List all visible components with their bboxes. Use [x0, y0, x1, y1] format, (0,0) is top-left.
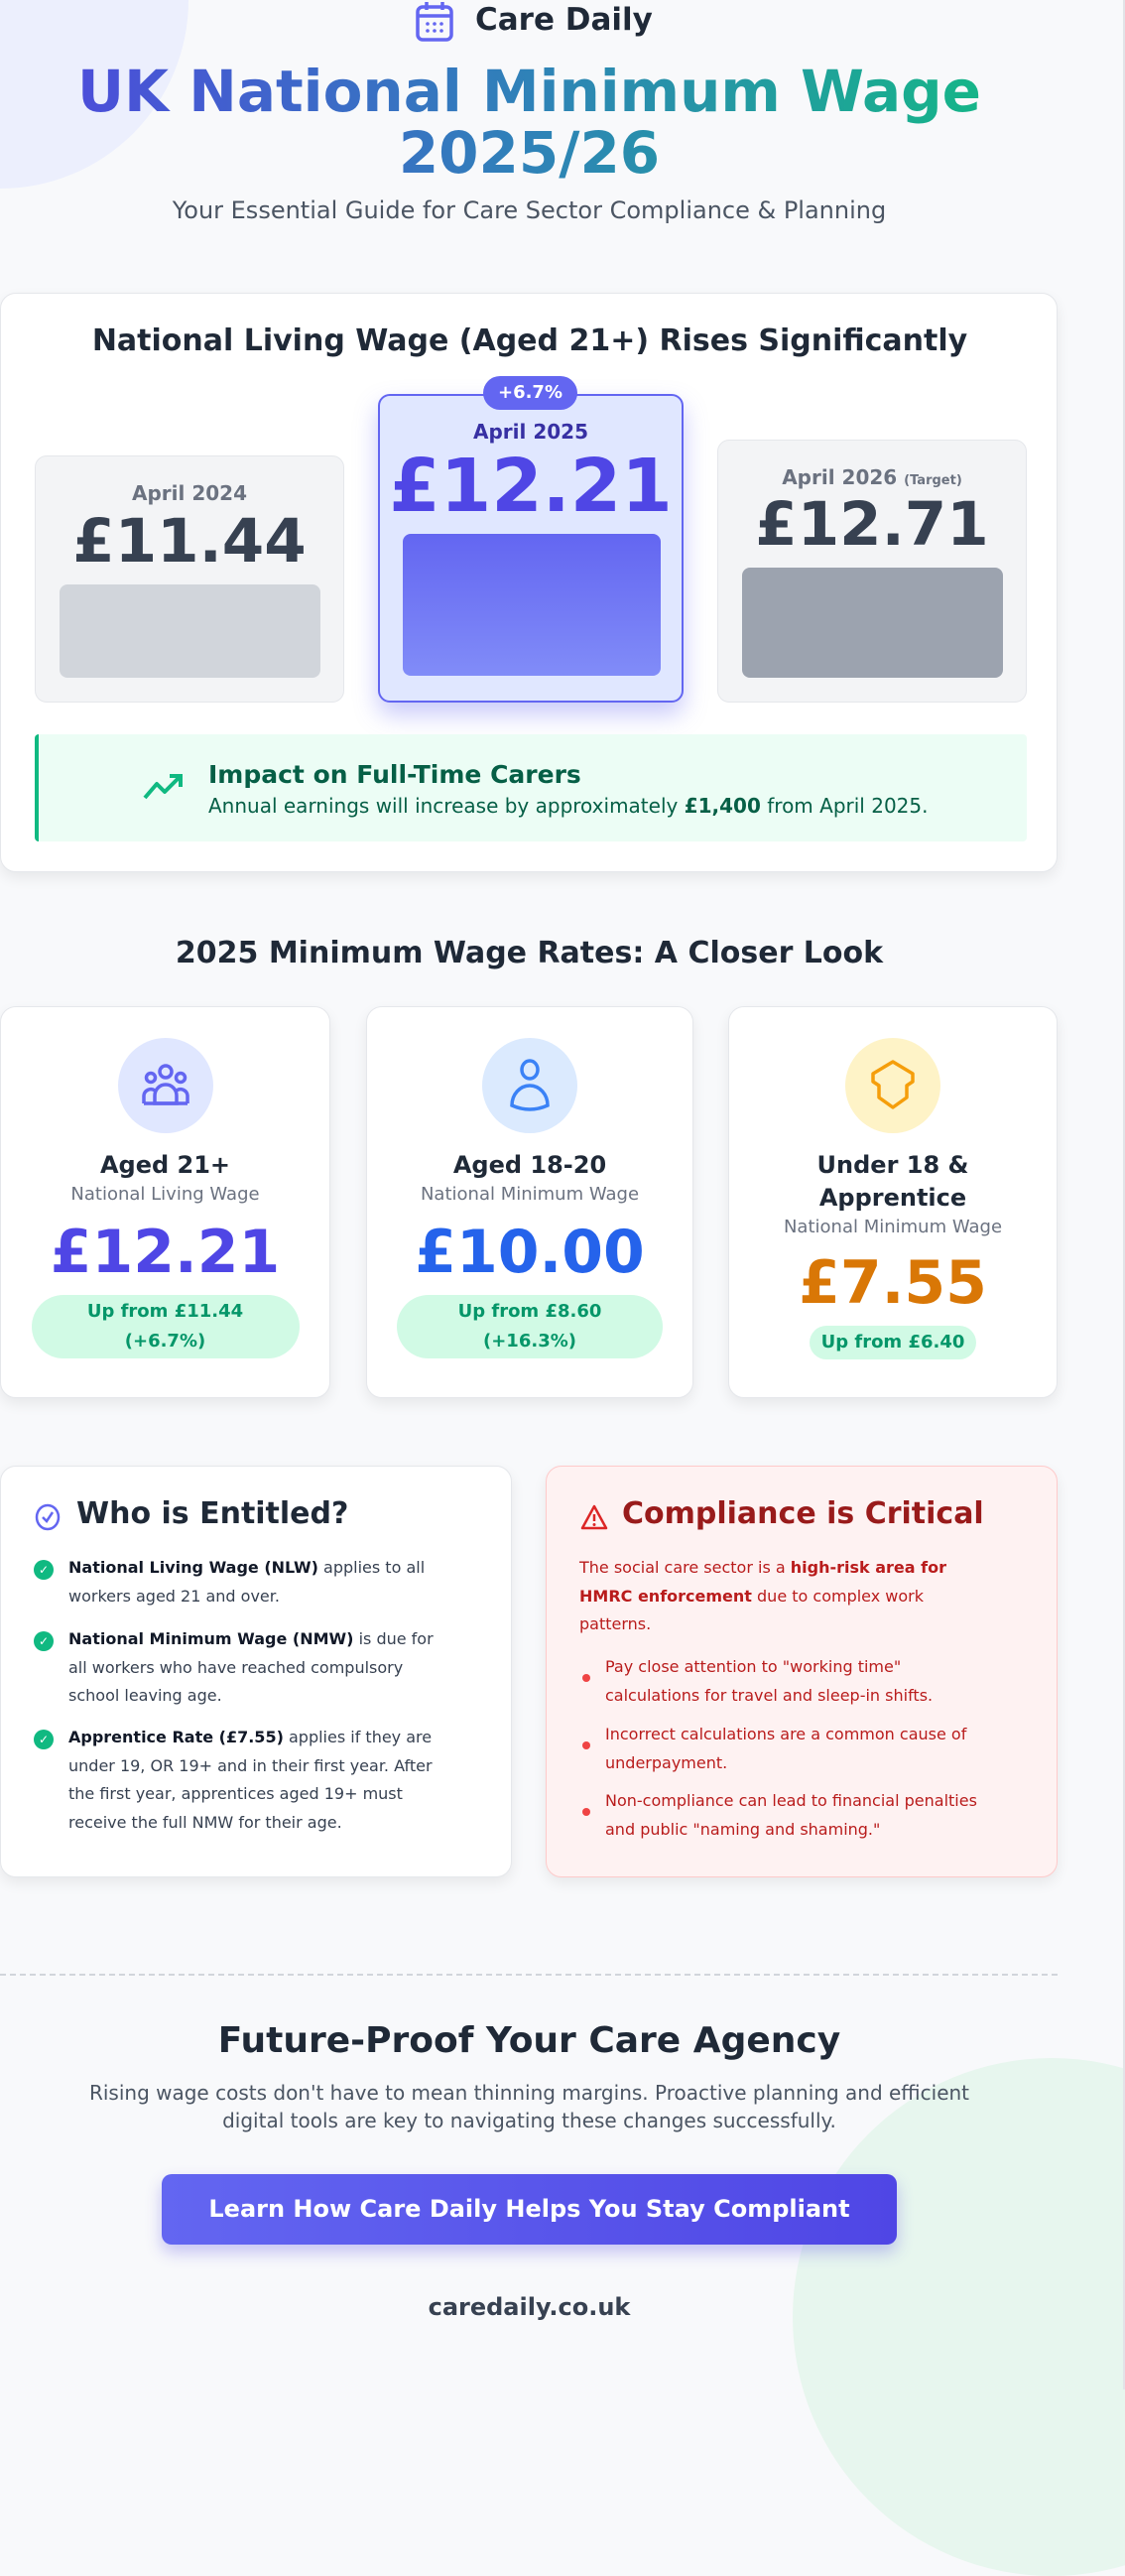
- pill: (+16.3%): [483, 1331, 576, 1352]
- rate card: aged 18-20: Aged 18-20: [453, 1151, 606, 1179]
- badge: +6.7%: +6.7%: [498, 382, 562, 403]
- card: April 2024: £11.44: [72, 506, 307, 577]
- bullet 2: underpayment.: [605, 1752, 727, 1772]
- icon: calendar: [416, 2, 453, 42]
- card: April 2025: April 2025: [473, 420, 588, 444]
- card: April 2026: [717, 440, 1027, 703]
- panel: compliance: Compliance is Critical: [622, 1496, 984, 1531]
- title: 2025/26: [399, 119, 660, 187]
- pill: Up from £11.44: [87, 1301, 243, 1322]
- list item: apprentice: the first year, apprentices aged 19+ must: [68, 1784, 403, 1803]
- rate card: aged 21+: [0, 1006, 330, 1398]
- footer url: caredaily.co.uk: [429, 2293, 630, 2321]
- button: [162, 2174, 897, 2245]
- card: April 2025: [378, 394, 684, 703]
- pill: Up from £8.60: [458, 1301, 601, 1322]
- list item: apprentice: receive the full NMW for their age.: [68, 1812, 342, 1832]
- rate card: under 18 & apprentice: National Minimum Wage: [784, 1217, 1002, 1237]
- panel: who is entitled: [0, 1466, 512, 1877]
- list item: NLW: National Living Wage (NLW) applies to all: [68, 1558, 425, 1577]
- card: April 2025: £12.21: [389, 444, 673, 529]
- rate card: aged 18-20: [366, 1006, 693, 1398]
- pill: Up from £6.40: [821, 1332, 964, 1352]
- callout: impact: [35, 734, 1027, 841]
- panel heading: National Living Wage (Aged 21+) Rises Significantly: [92, 323, 967, 358]
- icon: person: [482, 1038, 577, 1133]
- card: April 2024: [35, 455, 344, 703]
- card: April 2026: £12.71: [755, 489, 989, 560]
- panel: who is entitled: Who is Entitled?: [76, 1496, 348, 1531]
- rate card: under 18 & apprentice: [728, 1006, 1058, 1398]
- icon: group: [117, 1038, 212, 1133]
- title: [0, 61, 1059, 184]
- heading: [36, 1496, 348, 1531]
- list item: NMW: National Minimum Wage (NMW) is due for: [68, 1629, 434, 1648]
- rate card: under 18 & apprentice: Under 18 &: [817, 1151, 968, 1179]
- pill: (+6.7%): [125, 1331, 205, 1352]
- rate card: aged 21+: National Living Wage: [70, 1184, 260, 1205]
- list item: NMW: [34, 1629, 434, 1705]
- rate card: aged 21+: £12.21: [51, 1218, 280, 1287]
- bullet 2: Incorrect calculations are a common cause of: [605, 1725, 966, 1743]
- rate card: aged 18-20: £10.00: [415, 1218, 645, 1287]
- card: April 2024: April 2024: [132, 481, 247, 505]
- panel: national living wage rise: [0, 293, 1058, 872]
- decorative circle top-left: [0, 0, 188, 189]
- pill: [810, 1326, 976, 1359]
- section heading: 2025 Minimum Wage Rates: A Closer Look: [176, 936, 883, 970]
- bullet 3: and public "naming and shaming.": [605, 1820, 880, 1838]
- bullet 3: [582, 1791, 977, 1838]
- heading: [581, 1496, 984, 1531]
- right edge line: [1123, 0, 1125, 2389]
- text: ✓: [39, 1563, 49, 1577]
- list item: NMW: all workers who have reached compulsory: [68, 1657, 403, 1677]
- list item: apprentice: [34, 1728, 433, 1832]
- pill: [32, 1295, 300, 1358]
- badge: +6.7%: [483, 376, 577, 410]
- list item: NLW: [34, 1558, 425, 1606]
- rate card: under 18 & apprentice: Apprentice: [819, 1184, 966, 1212]
- callout: impact: Annual earnings will increase by approximately £1,400 from April 2025.: [208, 794, 928, 818]
- rate card: aged 21+: Aged 21+: [100, 1151, 230, 1179]
- logo: [416, 2, 653, 42]
- compliance intro: patterns.: [579, 1614, 651, 1633]
- rate card: under 18 & apprentice: £7.55: [799, 1248, 987, 1318]
- pill: [397, 1295, 663, 1358]
- callout: impact: Impact on Full-Time Carers: [208, 760, 581, 789]
- bullet 2: [582, 1725, 967, 1772]
- list item: NLW: workers aged 21 and over.: [68, 1586, 280, 1606]
- footer text: Rising wage costs don't have to mean thinning margins. Proactive planning and efficient digital tools are key to navigating these changes successfully.: [89, 2081, 969, 2132]
- compliance intro: HMRC enforcement due to complex work: [579, 1586, 924, 1606]
- list item: NMW: school leaving age.: [68, 1686, 222, 1705]
- panel: compliance: [546, 1466, 1058, 1877]
- icon: trending up: [143, 774, 183, 800]
- icon: graduation: [845, 1038, 940, 1133]
- bullet 1: Pay close attention to "working time": [605, 1657, 901, 1676]
- divider: [0, 1974, 1058, 1976]
- title: UK National Minimum Wage: [77, 58, 981, 125]
- list item: apprentice: under 19, OR 19+ and in their first year. After: [68, 1756, 433, 1774]
- text: ✓: [39, 1634, 49, 1648]
- footer heading: Future-Proof Your Care Agency: [218, 2020, 840, 2061]
- compliance intro: [579, 1558, 946, 1633]
- logo: Care Daily: [475, 2, 653, 38]
- decorative circle bottom-right: [793, 2058, 1125, 2576]
- button: Learn How Care Daily Helps You Stay Compliant: [208, 2195, 850, 2223]
- bullet 1: calculations for travel and sleep-in shifts.: [605, 1685, 933, 1705]
- card: April 2026: April 2026 (Target): [782, 465, 962, 489]
- subtitle: Your Essential Guide for Care Sector Compliance & Planning: [173, 196, 886, 224]
- text: ✓: [39, 1733, 49, 1746]
- bullet 3: Non-compliance can lead to financial penalties: [605, 1791, 977, 1810]
- list item: apprentice: Apprentice Rate (£7.55) applies if they are: [68, 1728, 432, 1746]
- compliance intro: The social care sector is a high-risk area for: [579, 1558, 946, 1577]
- bullet 1: [582, 1657, 933, 1705]
- rate card: aged 18-20: National Minimum Wage: [421, 1184, 639, 1205]
